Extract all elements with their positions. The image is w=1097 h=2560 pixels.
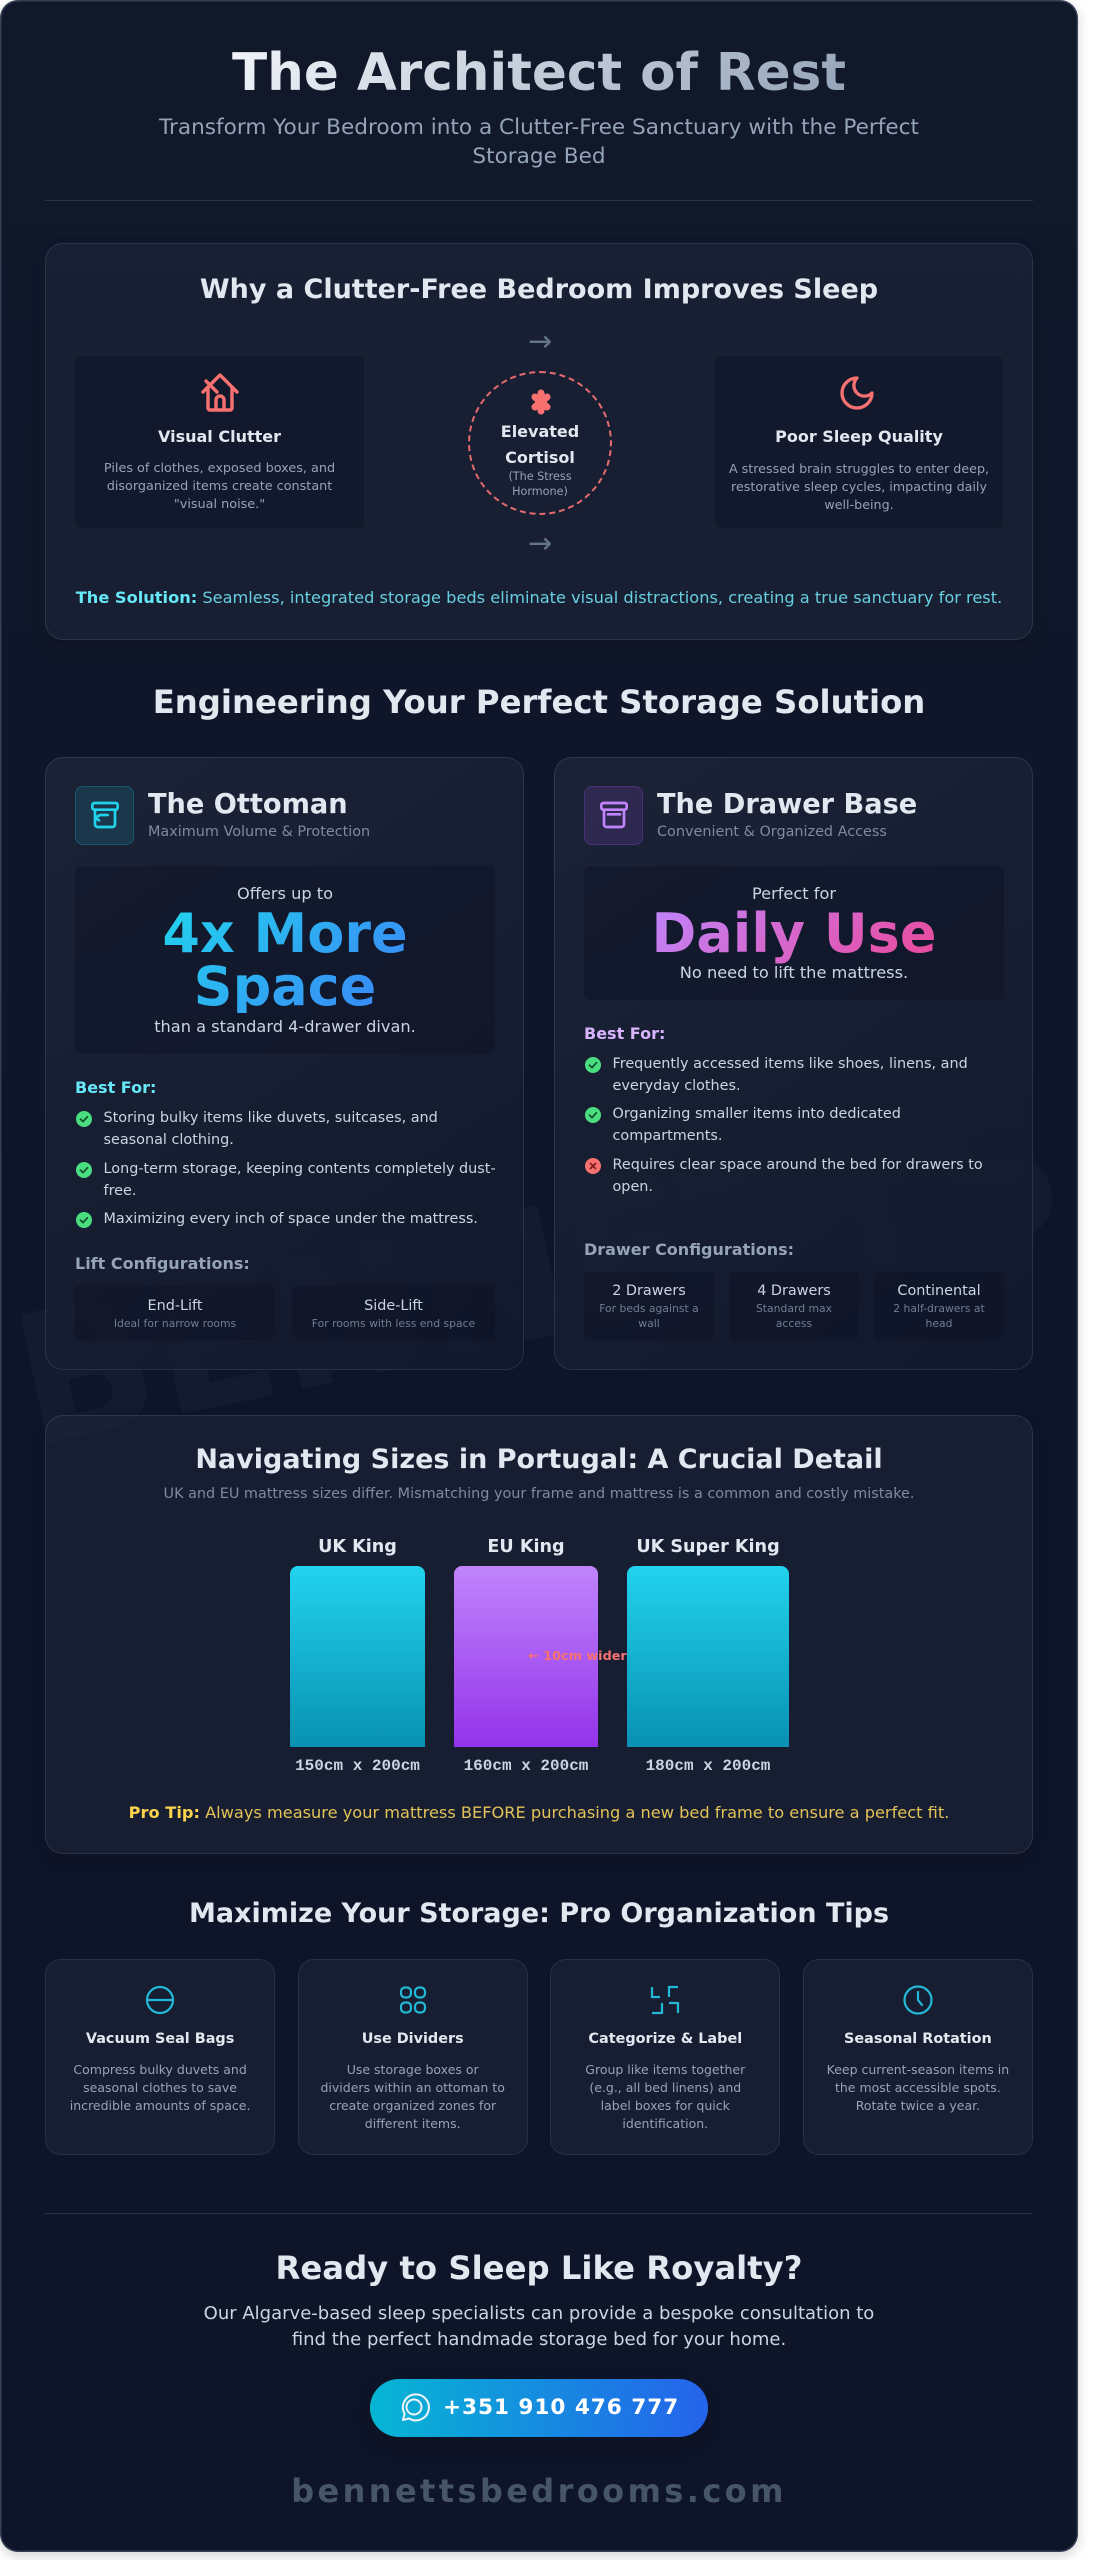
card: the drawer base bbox=[554, 757, 1033, 1370]
size: uk super king: UK Super King bbox=[636, 1537, 780, 1557]
box text: well-being. bbox=[824, 497, 894, 512]
tip: seasonal rotation: Keep current-season items in bbox=[827, 2062, 1009, 2077]
option: side-lift bbox=[292, 1285, 495, 1340]
box: poor sleep quality bbox=[715, 356, 1003, 528]
best for heading: Best For: bbox=[75, 1078, 156, 1097]
stat value: 4x More bbox=[162, 902, 408, 965]
phone number: +351 910 476 777 bbox=[443, 2395, 679, 2420]
best for item 2: free. bbox=[104, 1183, 136, 1199]
best for heading: Best For: bbox=[584, 1024, 665, 1043]
option: side-lift: For rooms with less end space bbox=[312, 1317, 475, 1330]
option: side-lift: Side-Lift bbox=[364, 1298, 423, 1314]
tip: categorize and label: Group like items together bbox=[585, 2062, 745, 2077]
icon: moon bbox=[840, 376, 874, 410]
pro tip: Pro Tip: Always measure your mattress BEFORE purchasing a new bed frame to ensure a perfect fit. bbox=[129, 1803, 949, 1822]
tip: categorize and label: identification. bbox=[622, 2116, 708, 2131]
size: eu king bbox=[454, 1537, 598, 1775]
circle: elevated cortisol bbox=[468, 371, 612, 515]
option: 4 drawers: access bbox=[776, 1316, 812, 1330]
best for item 2: compartments. bbox=[612, 1128, 722, 1144]
size: uk king: UK King bbox=[318, 1537, 397, 1557]
circle note bbox=[508, 470, 572, 498]
tip: seasonal rotation: Rotate twice a year. bbox=[856, 2098, 980, 2113]
tip: vacuum seal bags: Vacuum Seal Bags bbox=[86, 2031, 234, 2047]
option: continental: 2 half-drawers at bbox=[893, 1302, 985, 1315]
size: uk super king bbox=[627, 1537, 789, 1775]
size: uk king bbox=[290, 1537, 425, 1775]
tip: vacuum seal bags bbox=[45, 1959, 275, 2155]
icon: chat bubble bbox=[402, 2393, 430, 2422]
size: eu king: EU King bbox=[487, 1537, 565, 1557]
stat follow-up: No need to lift the mattress. bbox=[680, 963, 908, 982]
arrow: clutter to cortisol: → bbox=[528, 324, 552, 358]
icon: house bbox=[201, 373, 239, 412]
size: eu king: 160cm x 200cm bbox=[464, 1757, 588, 1775]
best for item 1: Storing bulky items like duvets, suitcases, and bbox=[104, 1110, 438, 1126]
call to action text: find the perfect handmade storage bed for your home. bbox=[292, 2329, 786, 2350]
option: 2 drawers: For beds against a bbox=[599, 1302, 699, 1315]
tip: seasonal rotation: the most accessible spots. bbox=[835, 2080, 1001, 2095]
circle note: (The Stress bbox=[508, 470, 572, 483]
phone button bbox=[370, 2379, 708, 2437]
stat value: Daily Use bbox=[652, 902, 936, 965]
box text: restorative sleep cycles, impacting daily bbox=[731, 479, 987, 494]
stat follow-up: than a standard 4-drawer divan. bbox=[154, 1017, 416, 1036]
panel intro: UK and EU mattress sizes differ. Mismatching your frame and mattress is a common and costly mistake. bbox=[164, 1486, 914, 1502]
box text bbox=[729, 461, 989, 512]
tip: vacuum seal bags: Compress bulky duvets and bbox=[73, 2062, 247, 2077]
box text: A stressed brain struggles to enter deep, bbox=[729, 461, 989, 476]
option: 4 drawers: Standard max bbox=[756, 1302, 832, 1315]
subtitle: Transform Your Bedroom into a Clutter-Free Sanctuary with the Perfect bbox=[159, 115, 919, 140]
best for item 1 bbox=[585, 1056, 968, 1094]
tip: categorize and label: (e.g., all bed linens) and bbox=[589, 2080, 741, 2095]
tip: categorize and label: Categorize & Label bbox=[588, 2031, 742, 2047]
icon: clock bbox=[903, 1985, 933, 2015]
subtitle: Storage Bed bbox=[472, 144, 606, 169]
arrow: cortisol to poor sleep: → bbox=[528, 526, 552, 560]
tip: seasonal rotation: Seasonal Rotation bbox=[844, 2031, 992, 2047]
subtitle bbox=[158, 115, 919, 169]
call to action text: Our Algarve-based sleep specialists can provide a bespoke consultation to bbox=[204, 2303, 874, 2324]
tip: use dividers bbox=[298, 1959, 528, 2155]
tip: categorize and label bbox=[550, 1959, 780, 2155]
box heading: Poor Sleep Quality bbox=[775, 427, 943, 446]
card title: The Ottoman bbox=[148, 789, 348, 820]
tip: categorize and label: label boxes for quick bbox=[601, 2098, 730, 2113]
section heading: storage solution: Engineering Your Perfect Storage Solution bbox=[153, 683, 925, 721]
option: continental: head bbox=[926, 1316, 952, 1330]
box: visual clutter bbox=[75, 356, 364, 528]
box text: Piles of clothes, exposed boxes, and bbox=[104, 461, 335, 476]
option: 4 drawers: 4 Drawers bbox=[757, 1283, 831, 1299]
box text: disorganized items create constant bbox=[107, 479, 332, 494]
tip: use dividers: different items. bbox=[365, 2116, 461, 2131]
background watermark: BENNETTS bbox=[0, 1063, 1078, 1488]
card: the ottoman bbox=[45, 757, 524, 1370]
best for item 2 bbox=[76, 1161, 496, 1199]
size: uk super king: 180cm x 200cm bbox=[646, 1757, 770, 1775]
circle heading: Elevated bbox=[501, 422, 579, 441]
circle heading: Cortisol bbox=[505, 448, 575, 467]
tip: vacuum seal bags: seasonal clothes to save bbox=[83, 2080, 237, 2095]
best for item 2: Long-term storage, keeping contents completely dust- bbox=[104, 1161, 496, 1177]
best for item 3: Maximizing every inch of space under the mattress. bbox=[104, 1211, 478, 1227]
panel: mattress sizes bbox=[45, 1415, 1033, 1854]
tip: use dividers: Use Dividers bbox=[362, 2031, 464, 2047]
stat lead-in: Offers up to bbox=[237, 884, 333, 903]
title: The Architect of Rest bbox=[232, 43, 846, 103]
option: 2 drawers bbox=[584, 1272, 714, 1340]
stat: 4x more space bbox=[75, 866, 495, 1053]
option: 2 drawers: 2 Drawers bbox=[612, 1283, 686, 1299]
call to action heading: Ready to Sleep Like Royalty? bbox=[276, 2249, 802, 2287]
tip: seasonal rotation bbox=[803, 1959, 1033, 2155]
size: uk king: 150cm x 200cm bbox=[295, 1757, 420, 1775]
card title: The Drawer Base bbox=[657, 789, 917, 820]
panel heading: Navigating Sizes in Portugal: A Crucial Detail bbox=[195, 1444, 883, 1475]
drawback item: open. bbox=[612, 1179, 653, 1195]
section heading: organization tips: Maximize Your Storage: Pro Organization Tips bbox=[189, 1898, 889, 1929]
drawback item: Requires clear space around the bed for drawers to bbox=[612, 1157, 983, 1173]
tip: use dividers: create organized zones for bbox=[329, 2098, 496, 2113]
stat lead-in: Perfect for bbox=[752, 884, 836, 903]
option: 2 drawers: wall bbox=[638, 1316, 660, 1330]
solution statement: The Solution: Seamless, integrated storage beds eliminate visual distractions, creating a true sanctuary for rest. bbox=[76, 588, 1002, 607]
website: bennettsbedrooms.com bbox=[291, 2472, 787, 2510]
stat value bbox=[162, 902, 408, 1018]
icon: corner brackets bbox=[650, 1986, 680, 2014]
circle heading bbox=[501, 422, 579, 467]
drawback item bbox=[585, 1157, 983, 1195]
best for item 1: everyday clothes. bbox=[612, 1078, 741, 1094]
option: continental bbox=[874, 1272, 1004, 1340]
best for item 1: seasonal clothing. bbox=[104, 1132, 234, 1148]
icon: stress asterisk bbox=[532, 390, 550, 414]
call to action text bbox=[204, 2303, 874, 2350]
option: end-lift: End-Lift bbox=[147, 1298, 202, 1314]
best for item 2: Organizing smaller items into dedicated bbox=[612, 1106, 901, 1122]
annotation: 10cm wider: ← 10cm wider bbox=[528, 1649, 627, 1664]
circle note: Hormone) bbox=[512, 485, 568, 498]
best for item 1: Frequently accessed items like shoes, linens, and bbox=[612, 1056, 968, 1072]
option: continental: Continental bbox=[897, 1283, 981, 1299]
stat: daily use bbox=[584, 866, 1004, 1000]
icon: vacuum circle bbox=[146, 1986, 174, 2014]
size chart bbox=[290, 1537, 789, 1775]
box text: "visual noise." bbox=[174, 497, 265, 512]
icon: four dividers bbox=[400, 1986, 426, 2014]
card subtitle: Convenient & Organized Access bbox=[657, 824, 887, 840]
option: 4 drawers bbox=[729, 1272, 859, 1340]
drawer configurations heading: Drawer Configurations: bbox=[584, 1240, 794, 1259]
tip: use dividers: dividers within an ottoman to bbox=[320, 2080, 505, 2095]
stat value: Space bbox=[194, 955, 376, 1018]
best for item 1 bbox=[76, 1110, 438, 1148]
option: end-lift: Ideal for narrow rooms bbox=[114, 1317, 236, 1330]
option: end-lift bbox=[75, 1285, 275, 1340]
box heading: Visual Clutter bbox=[158, 427, 281, 446]
panel heading: Why a Clutter-Free Bedroom Improves Sleep bbox=[200, 274, 878, 304]
panel: why a clutter-free bedroom improves sleep bbox=[45, 243, 1033, 640]
best for item 2 bbox=[585, 1106, 901, 1144]
box text bbox=[104, 461, 335, 512]
tip: vacuum seal bags: incredible amounts of space. bbox=[70, 2098, 250, 2113]
card subtitle: Maximum Volume & Protection bbox=[148, 824, 370, 840]
icon: drawer box bbox=[584, 786, 643, 845]
lift configurations heading: Lift Configurations: bbox=[75, 1254, 250, 1273]
tip: use dividers: Use storage boxes or bbox=[347, 2062, 479, 2077]
icon: ottoman box bbox=[75, 786, 134, 845]
